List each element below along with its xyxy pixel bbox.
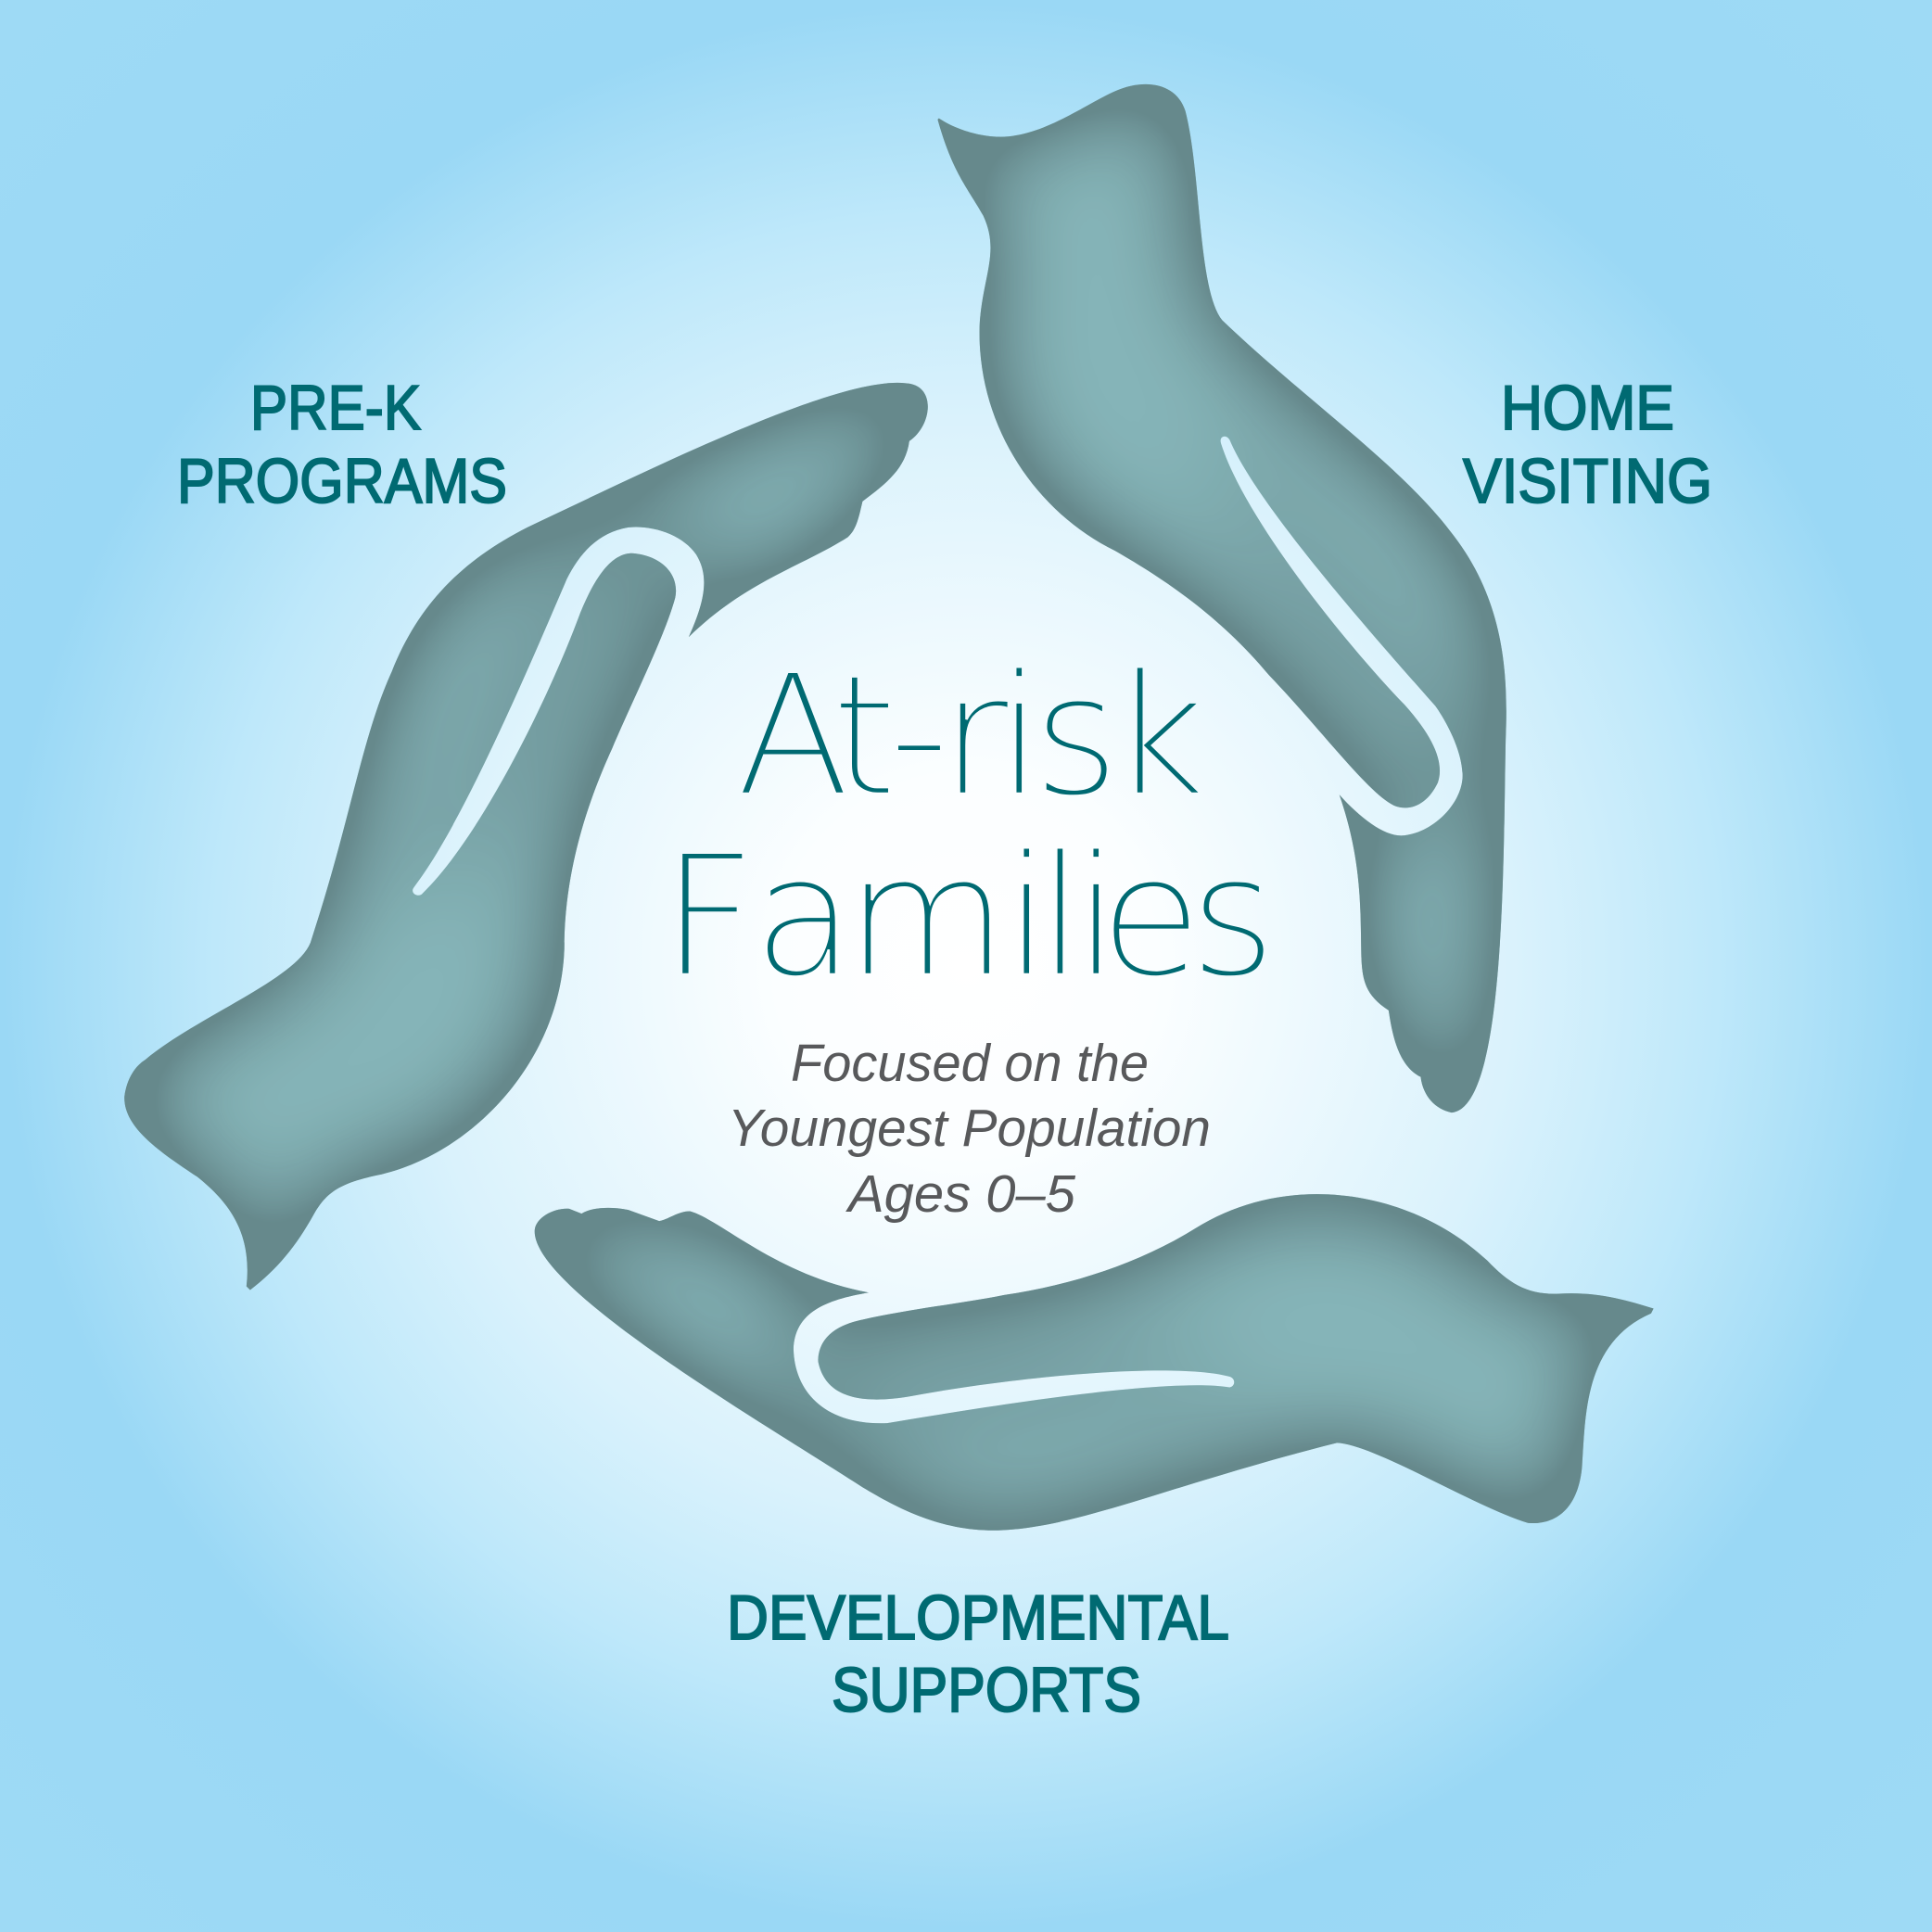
subtitle: Ages 0–5: [845, 1164, 1075, 1224]
label: home visiting: VISITING: [1463, 446, 1712, 516]
hand: home visiting: [937, 84, 1506, 1112]
label: home visiting: HOME: [1501, 373, 1674, 443]
title: [661, 640, 1277, 1014]
label: developmental supports: [727, 1582, 1229, 1725]
hand: pre-k programs: [124, 383, 928, 1290]
title: At-risk: [736, 640, 1206, 833]
subtitle: [728, 1034, 1211, 1224]
label: pre-k programs: PRE-K: [250, 373, 421, 443]
label: pre-k programs: [177, 373, 507, 516]
label: home visiting: [1463, 373, 1712, 516]
hand: developmental supports: [535, 1194, 1654, 1531]
label: developmental supports: SUPPORTS: [832, 1655, 1141, 1725]
label: pre-k programs: PROGRAMS: [177, 446, 507, 516]
subtitle: Youngest Population: [728, 1099, 1211, 1158]
label: developmental supports: DEVELOPMENTAL: [727, 1582, 1229, 1653]
title: Families: [661, 820, 1277, 1014]
subtitle: Focused on the: [791, 1034, 1149, 1093]
